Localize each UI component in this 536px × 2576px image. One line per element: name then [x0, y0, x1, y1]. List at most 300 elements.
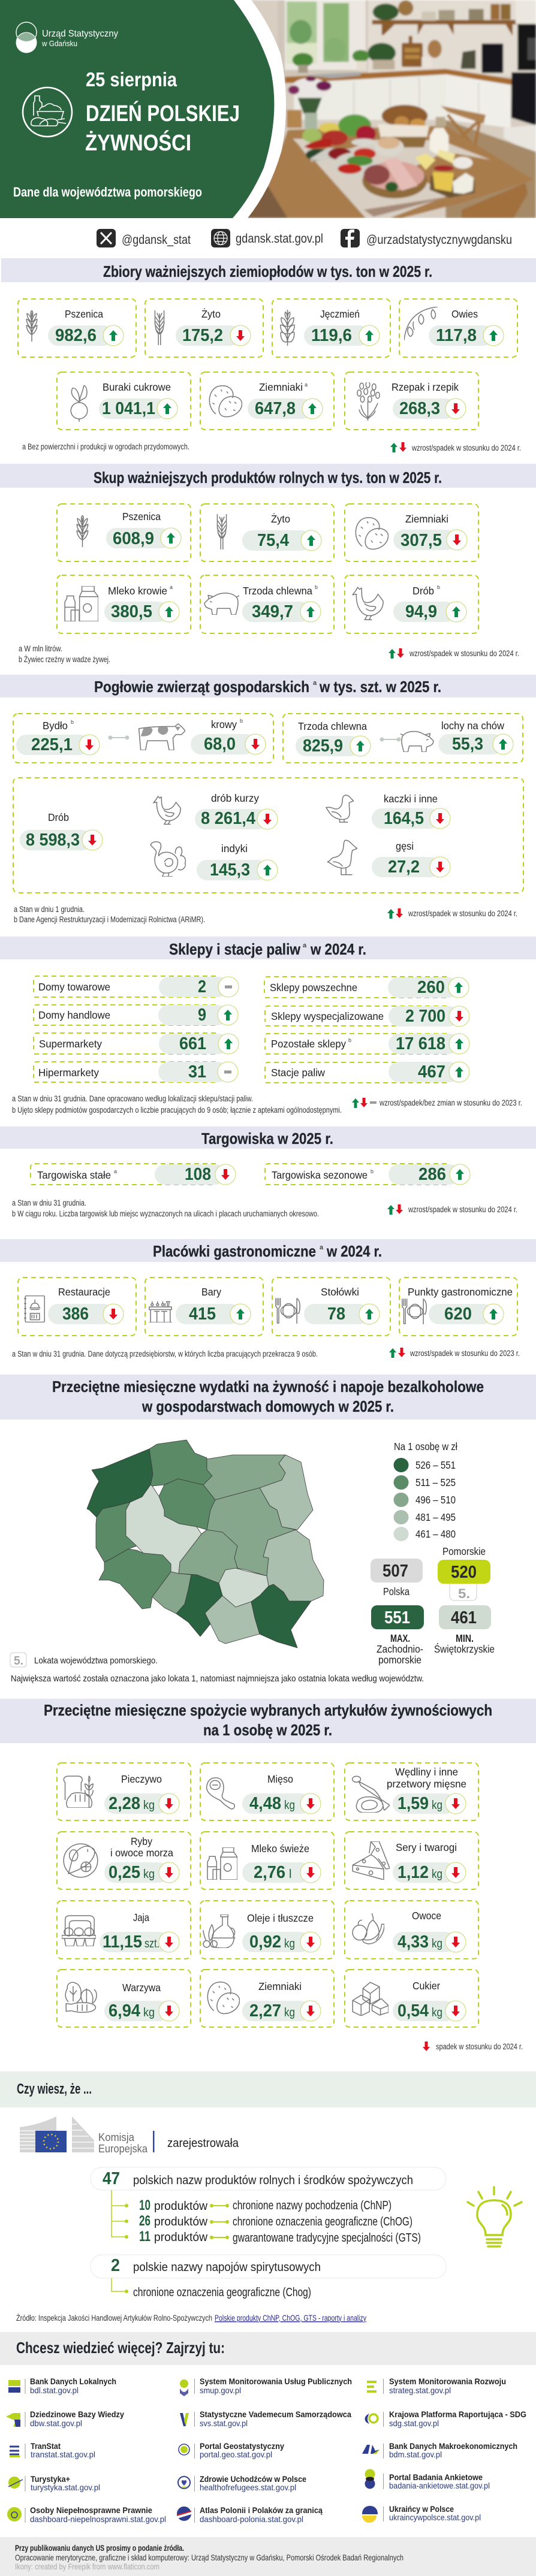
value: l	[289, 1868, 291, 1881]
card: Wędliny	[345, 1763, 478, 1820]
link: Bank Danych Lokalnych	[8, 2376, 116, 2395]
footnotes: a Stan w dniu 1 grudnia.	[14, 905, 85, 914]
value: 307,5	[401, 531, 442, 550]
heading band: Skup ważniejszych produktów rolnych w tys. ton w 2025 r.	[94, 469, 442, 487]
footnote mark: a	[170, 584, 173, 590]
label: Rzepak i rzepik	[392, 381, 459, 393]
trend	[300, 1862, 321, 1883]
logo: Urząd Statystyczny w Gdańsku	[16, 22, 118, 53]
value: 2,28	[109, 1794, 140, 1813]
heading band: w gospodarstwach domowych w 2025 r.	[141, 1397, 394, 1415]
footnote mark: b	[348, 1037, 351, 1043]
link: Bank Danych Lokalnych: Bank Danych Lokalnych	[30, 2376, 116, 2386]
link: Krajowa Platforma Raportująca - SDG: Krajowa Platforma Raportująca - SDG	[389, 2409, 526, 2419]
label: Restauracje	[58, 1286, 110, 1298]
icon: fish	[64, 1844, 98, 1877]
value	[158, 1005, 228, 1025]
trend	[103, 1304, 124, 1324]
rank note: Lokata województwa pomorskiego.	[34, 1656, 158, 1666]
heading band: Czy wiesz, że ...	[17, 2081, 92, 2097]
label: Mięso	[267, 1773, 293, 1785]
value	[389, 1062, 459, 1082]
label	[110, 1835, 173, 1859]
value: kg	[432, 1799, 442, 1812]
branch: Chog: chronione oznaczenia geograficzne (Chog)	[133, 2286, 311, 2299]
value	[242, 1793, 311, 1814]
value: 620	[444, 1304, 472, 1324]
trend	[257, 809, 278, 829]
value: 1,12	[398, 1863, 429, 1882]
label: Jęczmień	[320, 308, 360, 320]
map legend: 481 – 495	[415, 1511, 456, 1523]
heading band: a	[303, 942, 307, 949]
trend	[300, 602, 321, 622]
heading band: na 1 osobę w 2025 r.	[203, 1721, 332, 1739]
row: ChOG: produktów	[154, 2215, 208, 2228]
card: Ryby	[57, 1832, 191, 1889]
label: Drób	[412, 585, 434, 597]
value	[176, 325, 240, 346]
text: zarejestrowała: zarejestrowała	[167, 2137, 239, 2150]
label: Owies	[451, 308, 478, 320]
icon: light bulb	[468, 2187, 522, 2246]
photo: kitchen table with Polish food	[246, 0, 536, 218]
trend	[450, 1164, 470, 1185]
card: Bary	[145, 1278, 263, 1336]
value	[104, 602, 169, 622]
link: Portal Geostatystyczny	[179, 2441, 284, 2459]
icon: rapeseed	[357, 382, 380, 421]
label: Oleje i tłuszcze	[247, 1912, 314, 1924]
label: Pszenica	[122, 511, 161, 523]
trend	[161, 528, 181, 548]
connector	[108, 736, 130, 739]
link: System Monitorowania Usług Publicznych	[180, 2376, 352, 2396]
value: 68,0	[204, 735, 236, 754]
link: Ukraińcy w Polsce	[362, 2504, 481, 2523]
label: Pszenica	[65, 308, 103, 320]
value	[393, 398, 456, 419]
pill: 47 names: polskich nazw produktów rolnych i środków spożywczych	[133, 2174, 413, 2187]
value: 8 598,3	[26, 831, 80, 850]
card: Jaja	[57, 1901, 191, 1959]
trend	[350, 736, 371, 756]
stat: Polska: 507	[383, 1562, 408, 1581]
stat: MAX: 551	[384, 1608, 410, 1627]
value: 4,48	[249, 1794, 281, 1813]
stat: MIN: Świętokrzyskie	[434, 1642, 495, 1655]
value: 145,3	[210, 860, 250, 880]
value	[388, 977, 459, 998]
value	[191, 734, 255, 754]
icon: milk	[207, 1847, 237, 1880]
footnote mark: b	[315, 584, 318, 590]
map legend: 526 – 551	[415, 1459, 456, 1471]
section: Chcesz wiedzieć więcej	[0, 2332, 536, 2524]
card: Żyto	[145, 299, 263, 357]
icon: bar	[149, 1301, 171, 1322]
card: Owies	[399, 299, 517, 357]
value	[48, 325, 113, 346]
legend	[387, 908, 517, 919]
trend	[215, 1164, 236, 1185]
value: 260	[417, 978, 445, 997]
value	[393, 1793, 456, 1814]
heading band	[0, 937, 536, 959]
row: Domy handlowe	[34, 1005, 238, 1025]
section: Zbiory	[1, 258, 536, 452]
label: krowy	[211, 718, 237, 730]
row: ChOG	[139, 2213, 412, 2229]
value: 386	[62, 1304, 89, 1324]
value: 31	[188, 1062, 206, 1082]
card: Restauracje	[18, 1278, 136, 1336]
icon: meat	[207, 1778, 234, 1809]
label: przetwory mięsne	[387, 1778, 466, 1790]
stat: Pomorskie: 5.	[458, 1586, 470, 1601]
value: 647,8	[255, 399, 296, 418]
value: 11,15	[103, 1932, 142, 1952]
icon: cheese	[353, 1841, 390, 1880]
link: Bank Danych Lokalnych: bdl.stat.gov.pl	[30, 2385, 79, 2395]
value	[429, 1304, 493, 1324]
value: 27,2	[388, 857, 420, 877]
icon: beet	[71, 385, 88, 422]
value: 608,9	[113, 529, 154, 548]
link: System Monitorowania Usług Publicznych: System Monitorowania Usług Publicznych	[200, 2376, 352, 2386]
card: Drób	[345, 575, 478, 633]
footnote mark: b	[71, 719, 74, 725]
stat: Pomorskie: Pomorskie	[442, 1545, 486, 1557]
heading band: w 2024 r.	[326, 1242, 382, 1260]
icon: oat	[404, 307, 438, 340]
footer: Opracowanie merytoryczne, graficzne i skład komputerowy: Urząd Statystyczny w Gdańsku, Pomorski Ośrodek Badań Regionalnych	[15, 2553, 403, 2562]
label: gęsi	[396, 840, 414, 852]
heading band	[0, 2071, 536, 2107]
card: Cukier	[345, 1970, 478, 2027]
heading band: Chcesz wiedzieć więcej? Zajrzyj tu:	[16, 2339, 225, 2357]
label: Cukier	[412, 1980, 440, 1992]
card: Trzoda chlewna	[200, 575, 334, 633]
icon: oil	[203, 1914, 235, 1948]
row: ChNP: 10	[139, 2197, 150, 2213]
section: Wydatki	[0, 1375, 536, 1684]
value: 2,76	[254, 1863, 285, 1882]
card: Ziemniaki	[200, 1970, 334, 2027]
card: Rzepak i rzepik	[345, 372, 478, 430]
trend	[445, 2001, 466, 2021]
section: Placówki gastronomiczne	[0, 1239, 536, 1358]
section: Spożycie	[0, 1699, 536, 2051]
footnotes: a W mln litrów.	[19, 644, 62, 653]
value	[16, 735, 89, 755]
link: Portal Badania Ankietowe: badania-ankietowe.stat.gov.pl	[389, 2481, 490, 2490]
icon: rye	[217, 514, 227, 549]
trend	[300, 1932, 321, 1952]
label: Sery i twarogi	[396, 1841, 457, 1853]
label: lochy na chów	[441, 720, 504, 732]
link: Portal Badania Ankietowe	[365, 2469, 490, 2490]
card: Buraki cukrowe	[57, 372, 191, 430]
card: Jęczmień	[272, 299, 390, 357]
row: Sklepy wyspecjalizowane	[265, 1006, 469, 1026]
trend	[300, 2001, 321, 2021]
value: 94,9	[405, 602, 437, 621]
trend	[359, 325, 380, 346]
row: Targowiska stałe	[31, 1164, 236, 1185]
value	[242, 1932, 311, 1952]
footnotes: b Żywiec rzeźny w wadze żywej.	[19, 655, 110, 664]
value: kg	[432, 1937, 442, 1950]
row: GTS: gwarantowane tradycyjne specjalności (GTS)	[233, 2231, 421, 2245]
label: Targowiska sezonowe	[272, 1169, 368, 1181]
section: Targowiska	[0, 1127, 536, 1218]
label: Targowiska stałe	[37, 1169, 111, 1181]
icon: rye	[155, 310, 164, 345]
trend	[159, 602, 179, 622]
trend	[445, 1793, 466, 1814]
stat: Polska: Polska	[383, 1586, 409, 1597]
footnotes: a Stan w dniu 31 grudnia. Dane opracowano według lokalizacji sklepu/stacji paliw.	[12, 1094, 253, 1103]
value: 2 700	[405, 1007, 445, 1026]
icon: milk	[65, 586, 98, 621]
value: 268,3	[399, 399, 440, 418]
rank note	[10, 1653, 158, 1668]
value: kg	[432, 1868, 442, 1881]
link: Bank Danych Makroekonomicznych: Bank Danych Makroekonomicznych	[389, 2441, 517, 2451]
heading band: Placówki gastronomiczne	[153, 1242, 316, 1260]
value: 119,6	[311, 326, 352, 345]
pill: 2 names: 2	[111, 2256, 120, 2275]
icon: potato	[356, 518, 389, 549]
value: 55,3	[452, 735, 483, 754]
value: 75,4	[257, 531, 289, 550]
heading band	[0, 1127, 536, 1149]
value	[438, 734, 503, 754]
heading band: Pogłowie zwierząt gospodarskich	[94, 678, 309, 696]
card: Mleko świeże	[200, 1832, 334, 1889]
icon: plate	[276, 1298, 300, 1324]
label: Buraki cukrowe	[103, 381, 171, 393]
trend	[103, 325, 124, 346]
card: Owoce	[345, 1901, 478, 1959]
icon: potato	[209, 386, 242, 416]
row: GTS: produktów	[154, 2231, 208, 2244]
link: System Monitorowania Rozwoju: System Monitorowania Rozwoju	[389, 2376, 506, 2386]
footnotes: b W ciągu roku. Liczba targowisk lub miejsc wyznaczonych na ulicach i placach uruchamianych okresowo.	[12, 1209, 319, 1218]
label: Bary	[201, 1286, 221, 1298]
label: Ziemniaki	[405, 513, 448, 525]
legend	[387, 1204, 517, 1215]
row: Supermarkety	[34, 1033, 239, 1054]
footnotes	[12, 1094, 342, 1115]
logo: Komisja Europejska: Europejska	[98, 2143, 148, 2155]
trend	[218, 1034, 239, 1054]
icon: hen	[353, 587, 383, 620]
subtitle: Dane dla województwa pomorskiego	[13, 185, 202, 200]
link: Atlas Polonii i Polaków za granicą	[177, 2505, 323, 2524]
icon: fruit	[353, 1913, 384, 1944]
row: ChOG: chronione oznaczenia geograficzne (ChOG)	[233, 2215, 412, 2228]
link: Osoby Niepełnosprawne Prawnie: Osoby Niepełnosprawne Prawnie	[30, 2505, 152, 2515]
map of Poland	[87, 1440, 324, 1648]
map legend: 511 – 525	[415, 1476, 456, 1488]
stat: Pomorskie: 520	[451, 1563, 477, 1582]
legend	[389, 1348, 520, 1358]
link: Zdrowie Uchodźców w Polsce	[178, 2474, 306, 2492]
footnotes: b Ujęto sklepy podmiotów gospodarczych o liczbie pracujących do 9 osób; łącznie z aptekami ogólnodostępnymi.	[12, 1106, 342, 1115]
stat: MIN	[434, 1605, 495, 1655]
card: Ziemniaki	[200, 372, 334, 430]
panel: bydło i krowy	[13, 714, 273, 763]
value: 0,25	[109, 1863, 140, 1882]
link: System Monitorowania Rozwoju	[367, 2376, 506, 2395]
card: Pieczywo	[57, 1763, 191, 1820]
label: Warzywa	[122, 1982, 161, 1994]
link: Statystyczne Vademecum Samorządowca: svs.stat.gov.pl	[200, 2418, 248, 2428]
label: Domy handlowe	[38, 1009, 110, 1021]
value	[389, 1164, 460, 1185]
value: 415	[189, 1304, 216, 1324]
trend	[447, 530, 467, 550]
value	[242, 530, 311, 551]
heading band: a	[313, 680, 317, 687]
value	[159, 1034, 228, 1054]
label: Ziemniaki	[258, 1980, 302, 1992]
icon: sugar	[353, 1982, 389, 2016]
section: Czy wiesz	[0, 2071, 536, 2323]
icon: potato	[207, 1982, 240, 2013]
pill: 47 names: 47	[103, 2169, 120, 2188]
heading band	[0, 675, 536, 697]
label: Domy towarowe	[38, 981, 110, 993]
row: GTS	[139, 2228, 421, 2245]
link: Ukraińcy w Polsce: Ukraińcy w Polsce	[389, 2504, 454, 2514]
heading band	[0, 464, 536, 488]
row: Targowiska sezonowe	[265, 1164, 470, 1185]
value: kg	[143, 1799, 155, 1812]
value: 225,1	[31, 735, 73, 754]
pill: 2 names: polskie nazwy napojów spirytusowych	[133, 2261, 321, 2274]
value: 164,5	[384, 809, 424, 828]
value: 17 618	[396, 1034, 445, 1053]
label	[387, 1766, 466, 1790]
value: 78	[327, 1304, 345, 1324]
map legend: Na 1 osobę w zł	[394, 1440, 457, 1452]
link: Portal Geostatystyczny: Portal Geostatystyczny	[200, 2441, 284, 2451]
panel: drób	[13, 778, 523, 893]
label: Trzoda chlewna	[298, 720, 367, 732]
value: 117,8	[436, 326, 477, 345]
label: kaczki i inne	[384, 793, 438, 805]
value: 982,6	[55, 326, 97, 345]
trend	[302, 398, 323, 419]
link: Zdrowie Uchodźców w Polsce: healthofrefugees.stat.gov.pl	[200, 2483, 296, 2492]
handle: Facebook: @urzadstatystycznywgdansku	[366, 233, 512, 247]
icon: bread	[64, 1776, 93, 1808]
label: Żyto	[201, 308, 221, 320]
link: Bank Danych Makroekonomicznych: bdm.stat.gov.pl	[389, 2450, 442, 2459]
stat: MAX: Zachodnio-	[377, 1643, 423, 1655]
handle: X: @gdansk_stat	[122, 233, 191, 247]
icon: duck	[326, 795, 354, 822]
icon: ham	[353, 1776, 390, 1813]
footnote mark: a	[305, 382, 308, 388]
value: 661	[179, 1034, 206, 1053]
card: Sery i twarogi	[345, 1832, 478, 1889]
label: Drób	[48, 811, 69, 823]
value	[242, 602, 311, 622]
value	[242, 2001, 311, 2021]
trend	[230, 325, 251, 346]
link: Portal Geostatystyczny: portal.geo.stat.gov.pl	[200, 2450, 272, 2459]
value	[106, 528, 171, 548]
icon: wheat	[77, 515, 88, 547]
stat: MAX: pomorskie	[378, 1654, 421, 1666]
icon: X	[97, 229, 116, 247]
stat: Pomorskie	[438, 1545, 490, 1601]
label: Bydło	[43, 720, 68, 732]
value	[197, 860, 267, 880]
trend	[359, 1304, 380, 1324]
link: Dziedzinowe Bazy Wiedzy: Dziedzinowe Bazy Wiedzy	[30, 2409, 124, 2419]
trend	[159, 1932, 179, 1952]
link: Turystyka+	[8, 2474, 100, 2492]
label: Stacje paliw	[271, 1067, 325, 1079]
card: Warzywa	[57, 1970, 191, 2027]
link: Turystyka+: Turystyka+	[31, 2474, 70, 2484]
value: szt.	[144, 1937, 159, 1950]
logo: Komisja Europejska	[20, 2116, 155, 2155]
link: Dziedzinowe Bazy Wiedzy: dbw.stat.gov.pl	[30, 2418, 82, 2428]
value	[48, 1304, 113, 1324]
footnotes: b Dane Agencji Restrukturyzacji i Modernizacji Rolnictwa (ARiMR).	[14, 915, 205, 924]
value	[393, 1932, 456, 1952]
label: Pozostałe sklepy	[271, 1038, 346, 1050]
label: Jaja	[133, 1911, 149, 1923]
trend	[257, 860, 278, 880]
logo: Urząd Statystyczny w Gdańsku: Urząd Statystyczny	[42, 29, 118, 39]
note: Największa wartość została oznaczona jako lokata 1, natomiast najmniejsza jako ostatnia lokata według województw.	[11, 1674, 424, 1684]
label: indyki	[221, 842, 248, 854]
green title panel	[0, 0, 274, 218]
link: Osoby Niepełnosprawne Prawnie: dashboard-niepelnosprawni.stat.gov.pl	[30, 2514, 166, 2524]
trend	[79, 735, 100, 755]
label: Hipermarkety	[38, 1067, 99, 1079]
value	[393, 1862, 456, 1883]
footnote mark: b	[437, 584, 440, 590]
trend	[449, 1034, 469, 1054]
trend	[218, 1005, 238, 1025]
card: Oleje i tłuszcze	[200, 1901, 334, 1959]
heading band: w tys. szt. w 2025 r.	[319, 678, 441, 696]
pill: 2 names	[91, 2255, 446, 2278]
trend	[157, 398, 177, 419]
map legend	[393, 1440, 457, 1541]
value: 0,54	[398, 2001, 429, 2021]
heading band: Sklepy i stacje paliw	[169, 940, 301, 958]
legend	[390, 442, 521, 452]
link: Bank Danych Makroekonomicznych	[362, 2441, 517, 2459]
map legend: 496 – 510	[415, 1494, 456, 1506]
value: kg	[432, 2006, 442, 2019]
title: DZIEŃ POLSKIEJ	[86, 100, 240, 126]
footnote mark: b	[240, 718, 243, 724]
row: ChNP	[139, 2197, 392, 2213]
link: System Monitorowania Usług Publicznych: smup.gov.pl	[200, 2385, 241, 2395]
link: TranStat: transtat.stat.gov.pl	[31, 2450, 95, 2459]
label: Ziemniaki	[259, 381, 303, 393]
